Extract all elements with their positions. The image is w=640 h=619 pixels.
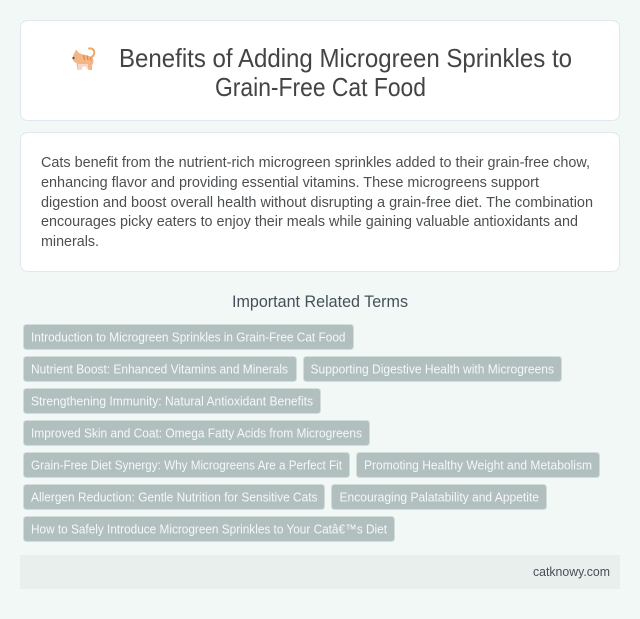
tag: palatability: Encouraging Palatability and Appetite <box>340 490 539 504</box>
footer bar <box>20 555 620 589</box>
heading: important related terms: Important Related Terms <box>232 292 408 311</box>
tag: allergen reduction: Allergen Reduction: Gentle Nutrition for Sensitive Cats <box>31 490 318 504</box>
tag: healthy weight <box>356 452 600 478</box>
tag: healthy weight: Promoting Healthy Weight and Metabolism <box>364 458 592 472</box>
title text: Benefits of Adding Microgreen Sprinkles to <box>119 43 572 73</box>
tag: immunity: Strengthening Immunity: Natural Antioxidant Benefits <box>31 394 313 408</box>
tag: nutrient boost <box>24 356 296 382</box>
tag: immunity <box>24 388 320 414</box>
summary text: digestion and boost overall health without disrupting a grain-free diet. The combination <box>41 194 593 211</box>
title text: Grain-Free Cat Food <box>215 72 426 102</box>
tag: grain-free synergy: Grain-Free Diet Synergy: Why Microgreens Are a Perfect Fit <box>31 458 342 472</box>
icon: cat <box>72 48 94 70</box>
tag: safe introduction: How to Safely Introduce Microgreen Sprinkles to Your Catâ€™s Diet <box>31 522 387 536</box>
tag list <box>24 324 600 542</box>
tag: introduction <box>24 324 354 350</box>
summary text: encourages picky eaters to enjoy their meals while gaining valuable antioxidants and <box>41 213 578 230</box>
summary text <box>41 154 593 250</box>
footer text: catknowy.com <box>533 564 610 579</box>
tag: skin and coat: Improved Skin and Coat: Omega Fatty Acids from Microgreens <box>31 426 362 440</box>
tag: digestive health <box>304 356 562 382</box>
tag: skin and coat <box>24 420 370 446</box>
title card <box>20 20 620 120</box>
title text <box>119 43 572 102</box>
tag: grain-free synergy <box>24 452 350 478</box>
tag: palatability <box>332 484 546 510</box>
summary text: Cats benefit from the nutrient-rich microgreen sprinkles added to their grain-free chow, <box>41 154 590 171</box>
summary text: enhancing flavor and providing essential vitamins. These microgreens support <box>41 174 540 191</box>
tag: safe introduction <box>24 516 394 542</box>
tag: digestive health: Supporting Digestive Health with Microgreens <box>310 362 554 376</box>
summary text: minerals. <box>41 233 99 250</box>
tag: allergen reduction <box>24 484 324 510</box>
tag: introduction: Introduction to Microgreen Sprinkles in Grain-Free Cat Food <box>31 330 346 344</box>
summary card <box>20 132 620 272</box>
tag: nutrient boost: Nutrient Boost: Enhanced Vitamins and Minerals <box>31 362 288 376</box>
